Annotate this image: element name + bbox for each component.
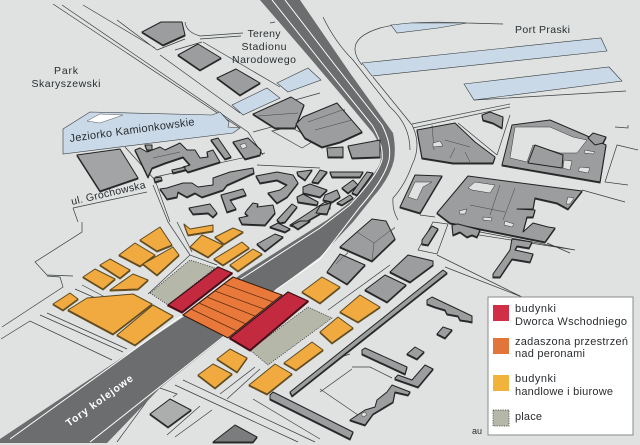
label: Tereny Stadionu Narodowego: Narodowego xyxy=(232,54,296,66)
buildings: top-left, stadium area xyxy=(77,22,362,191)
station building: left xyxy=(168,267,232,312)
legend: commercial buildings xyxy=(493,373,613,398)
station building: right xyxy=(230,292,308,350)
label: Tereny Stadionu Narodowego xyxy=(232,28,296,66)
legend: station buildings: budynki xyxy=(515,303,556,315)
legend: platform roof: zadaszona przestrzeń xyxy=(515,336,628,348)
label: Park Skaryszewski xyxy=(32,65,100,90)
buildings: south-east of the station xyxy=(150,219,472,442)
legend xyxy=(488,297,633,435)
legend: commercial buildings: budynki xyxy=(515,373,556,385)
label: ul. Grochowska: ul. Grochowska xyxy=(70,179,147,208)
label: Tereny Stadionu Narodowego: Stadionu xyxy=(242,41,287,53)
commercial and office buildings xyxy=(53,224,380,394)
station platform roof xyxy=(183,277,282,338)
square: right plaza xyxy=(250,307,332,365)
legend: station buildings xyxy=(493,303,627,328)
water: Jeziorko Kamionkowskie xyxy=(63,112,240,154)
legend: squares xyxy=(493,410,542,426)
label: Port Praski: Port Praski xyxy=(515,24,570,36)
buildings: Port Praski blocks xyxy=(400,112,606,277)
water: Port Praski basins and stadium ponds xyxy=(232,23,622,115)
credit: au xyxy=(472,426,482,436)
buildings: central housing estate xyxy=(135,138,380,251)
label: Tereny Stadionu Narodowego: Tereny xyxy=(248,28,281,40)
label: Park Skaryszewski: Skaryszewski xyxy=(32,78,100,90)
legend: station buildings: Dworca Wschodniego xyxy=(515,316,627,328)
legend: platform roof: nad peronami xyxy=(515,348,585,360)
label: Jeziorko Kamionkowskie: Jeziorko Kamionkowskie xyxy=(69,116,195,145)
legend: platform roof xyxy=(493,336,628,360)
label: Park Skaryszewski: Park xyxy=(54,65,79,77)
square: left plaza xyxy=(150,260,215,305)
label: Tory kolejowe: Tory kolejowe xyxy=(64,373,136,429)
legend: squares: place xyxy=(515,411,542,423)
railway tracks xyxy=(0,0,395,443)
legend: commercial buildings: handlowe i biurowe xyxy=(515,386,613,398)
